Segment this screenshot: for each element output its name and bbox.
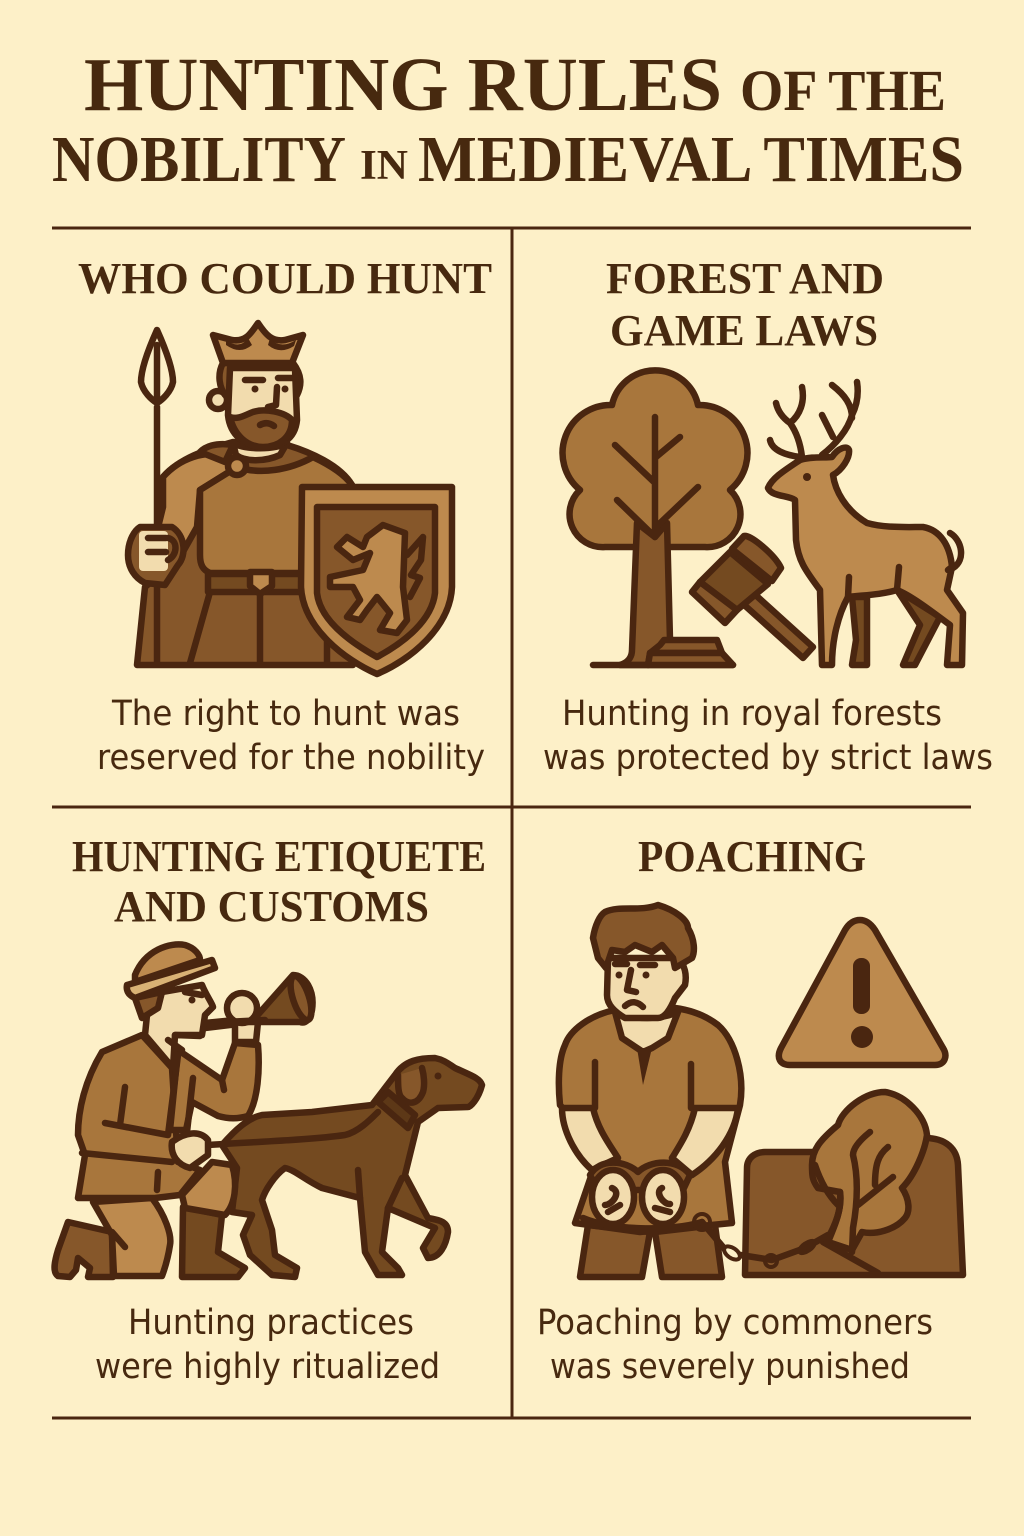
text: who could hunt: reserved for the nobility xyxy=(97,738,485,778)
grid lines xyxy=(52,228,971,1418)
title: IN xyxy=(360,143,408,189)
title: OF THE xyxy=(740,58,946,123)
text: hunting etiquette: Hunting practices xyxy=(128,1303,414,1343)
icon: tree, gavel and deer xyxy=(563,370,963,665)
text: who could hunt: The right to hunt was xyxy=(111,694,460,734)
heading: forest and game laws xyxy=(606,254,884,355)
title: HUNTING RULES xyxy=(84,43,722,127)
title: NOBILITY xyxy=(52,123,346,196)
text: forest and game laws: was protected by strict laws xyxy=(543,738,993,778)
icon: kneeling hunter with horn and hound xyxy=(55,944,482,1277)
panel: who could hunt xyxy=(78,254,492,778)
heading: hunting etiquete and customs xyxy=(72,832,486,931)
text: hunting etiquette xyxy=(95,1303,440,1387)
text: hunting etiquette: were highly ritualized xyxy=(95,1347,440,1387)
text: forest and game laws: Hunting in royal forests xyxy=(562,694,942,734)
heading: forest and game laws: FOREST AND xyxy=(606,254,884,303)
icon: noble with spear and shield xyxy=(128,323,452,674)
title: MEDIEVAL TIMES xyxy=(418,123,964,196)
panel: hunting etiquette and customs xyxy=(55,832,486,1387)
heading: who could hunt: WHO COULD HUNT xyxy=(78,254,492,303)
text: poaching: was severely punished xyxy=(550,1347,910,1387)
text: poaching xyxy=(537,1303,933,1387)
heading: hunting etiquete and customs: HUNTING ETIQUETE xyxy=(72,832,486,881)
heading: forest and game laws: GAME LAWS xyxy=(610,306,878,355)
heading: hunting etiquete and customs: AND CUSTOMS xyxy=(114,882,429,931)
panel: forest and game laws xyxy=(543,254,993,778)
panel: poaching xyxy=(537,832,963,1387)
icon: poacher with shackles, warning sign and tree xyxy=(559,905,963,1277)
title xyxy=(52,43,964,196)
heading: poaching: POACHING xyxy=(638,832,866,881)
text: forest and game laws xyxy=(543,694,993,778)
text: poaching: Poaching by commoners xyxy=(537,1303,933,1343)
text: who could hunt xyxy=(97,694,485,778)
